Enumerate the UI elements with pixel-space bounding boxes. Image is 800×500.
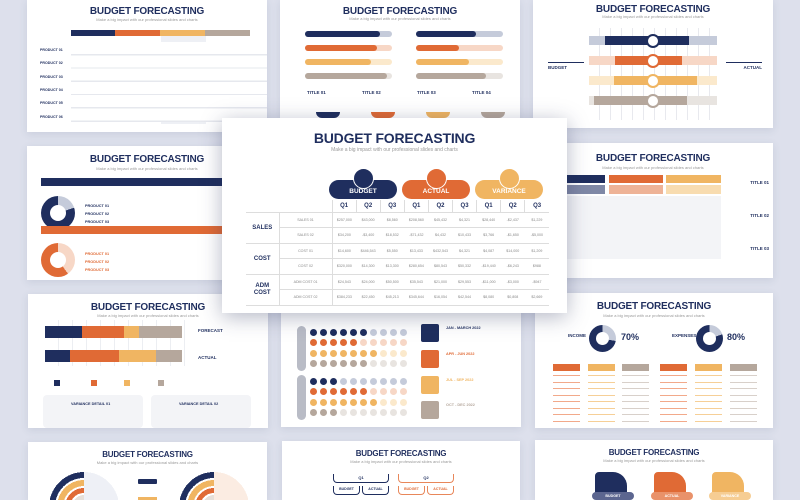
tab: variance: VARIANCE [721,494,739,498]
quarter icons and labels: APR - JUN 2022 [446,352,474,356]
data table: $14,000 [506,249,519,253]
header pill: variance: VARIANCE [492,188,526,195]
title: BUDGET FORECASTING [90,6,204,17]
Q2 bracket: BUDGET [404,487,419,491]
data table: Q3 [461,203,469,209]
product labels: PRODUCT 05 [40,101,63,105]
data table: $3,766 [483,233,494,237]
income pct: 70% [621,332,639,342]
data table: $18,532 [386,233,399,237]
data table: $22,450 [362,295,375,299]
actual label: ACTUAL [744,65,762,70]
data table: ADM COST 02 [294,295,317,299]
data table: $21,000 [434,280,447,284]
product labels: PRODUCT 03 [40,75,63,79]
data table: $8,080 [483,295,494,299]
quarter icons and labels [421,324,481,419]
slide: brackets bottom-middle: BUDGET FORECASTING [356,449,446,458]
data table: -$5,000 [531,233,543,237]
icons [316,112,505,118]
actual pill [297,375,306,420]
Q2 bracket: ACTUAL [433,487,448,491]
legend [54,380,164,386]
column headers and boxes [553,364,757,422]
titles [307,90,491,95]
labels forecast/actual [198,328,223,360]
center slide: main budget forecasting table [222,118,567,313]
data table: $5,550 [387,249,398,253]
variance boxes [43,395,251,428]
tab: variance [709,472,751,500]
data table: $50,332 [458,264,471,268]
slide: stacked bars left: BUDGET FORECASTING [91,302,205,313]
data table: ADM [255,282,269,288]
title: BUDGET FORECASTING [314,130,475,146]
month headers [567,175,721,259]
data table: Q3 [533,203,541,209]
data table [246,200,549,306]
data table: $16,054 [434,295,447,299]
data table: $2,669 [531,295,542,299]
data table: $14,300 [362,264,375,268]
data table: $80,543 [434,264,447,268]
variance boxes: VARIANCE DETAIL 02 [179,402,218,406]
data table: Q1 [485,203,493,209]
slide: income expenses donuts right: BUDGET FORECASTING [597,301,711,312]
income rows [85,204,109,224]
data table: COST 02 [298,264,313,268]
income header bar [41,178,261,186]
slide: horizontal bars top-middle: Make a big impact with our professional slides and charts [349,16,451,21]
slide: radial bottom-left: Make a big impact with our professional slides and charts [97,460,198,465]
budget label: BUDGET [548,65,567,70]
data table: ADM COST 01 [294,280,317,284]
slide: radial bottom-left: BUDGET FORECASTING [102,450,193,459]
quarter icons and labels: JAN - MARCH 2022 [446,326,481,330]
expense rows: PRODUCT 01 [85,252,109,256]
slide: income expenses donuts right: INCOME [568,333,586,338]
data table: COST [254,256,271,262]
data table: Q1 [412,203,420,209]
radial chart right [180,472,248,500]
month headers [71,30,250,36]
data table: $4,087 [483,249,494,253]
data table: -$3,000 [507,280,519,284]
data table: $28,440 [482,218,495,222]
slide: diverging chart top-right [533,0,773,128]
column shading [161,36,206,124]
budget bars [305,31,392,79]
product labels [40,48,63,119]
data table: $42,544 [458,295,471,299]
income rows: PRODUCT 01 [85,204,109,208]
data table: $34,200 [338,233,351,237]
data table: $43,000 [362,218,375,222]
right titles [750,180,769,251]
titles: TITLE 03 [417,90,436,95]
slide: tabs bottom-right: Make a big impact with our professional slides and charts [603,458,705,463]
data table: Q1 [340,203,348,209]
slide: income/expenses left [27,146,267,280]
product labels: PRODUCT 06 [40,115,63,119]
data table: Q2 [436,203,444,209]
data table: $4,432 [435,233,446,237]
variance boxes: VARIANCE DETAIL 01 [71,402,110,406]
data table: -$1,650 [507,233,519,237]
data table: -$947 [532,280,541,284]
data table: $1,209 [531,249,542,253]
data table: Q2 [509,203,517,209]
slide: income expenses donuts right: Make a big impact with our professional slides and charts [603,313,705,318]
data table: $50,500 [386,280,399,284]
data table: $4,321 [459,249,470,253]
Q2 bracket: Q2 [423,475,429,480]
Q2 bracket [398,474,454,495]
expense rows [85,252,109,272]
data table: $0,808 [507,295,518,299]
slide: monthly table right: Make a big impact with our professional slides and charts [602,165,704,170]
titles: TITLE 02 [362,90,381,95]
data table: -$3,400 [362,233,374,237]
stacked bar chart [45,320,185,366]
right titles: TITLE 03 [750,246,769,251]
slide: income/expenses left: BUDGET FORECASTING [90,154,204,165]
data table: SALES 02 [297,233,314,237]
subtitle: Make a big impact with our professional slides and charts [331,147,458,153]
tab: budget [592,472,634,500]
slide: stacked bars left: Make a big impact with our professional slides and charts [97,313,199,318]
slide: product table top-left [27,0,267,132]
titles: TITLE 04 [472,90,491,95]
tab: actual [651,472,693,500]
slide: brackets bottom-middle [282,441,520,500]
slide: tabs bottom-right [535,440,773,500]
data table: $280,654 [409,264,424,268]
data table: $14,600 [338,249,351,253]
chart [589,28,717,120]
Q1 bracket: BUDGET [339,487,354,491]
product labels: PRODUCT 01 [40,48,63,52]
slide: diverging chart top-right: BUDGET FORECASTING [596,4,710,15]
legend tag [138,479,157,484]
tab: budget: BUDGET [605,494,621,498]
slide: dot matrix middle [281,300,521,427]
data table: $320,000 [337,264,352,268]
data table: SALES 01 [297,218,314,222]
data table: $10,433 [458,233,471,237]
header pill: variance [475,169,543,199]
data table: -$19,440 [482,264,496,268]
data table: COST 01 [298,249,313,253]
data table: -$11,000 [482,280,496,284]
slide: income expenses donuts right: 80% [727,332,745,342]
data table: $13,433 [410,249,423,253]
quarter icons and labels: JUL - SEP 2022 [446,378,474,382]
data table: $4,321 [459,218,470,222]
slide: income expenses donuts right: EXPENSES [672,333,696,338]
header pill: actual [402,169,470,199]
expense rows: PRODUCT 02 [85,260,109,264]
product labels: PRODUCT 04 [40,88,63,92]
expenses header bar [41,226,261,234]
Q1 bracket: Q1 [358,475,364,480]
slide: income/expenses left: Make a big impact with our professional slides and charts [96,166,198,171]
expenses donut [41,243,75,277]
quarter icons and labels: OCT - DEC 2022 [446,403,475,407]
header pill: budget: BUDGET [349,188,377,195]
data table: SALES [252,224,272,230]
data table: $432,543 [433,249,448,253]
header pill: actual: ACTUAL [423,188,449,195]
data table: -$2,437 [507,218,519,222]
right titles: TITLE 02 [750,213,769,218]
dots [310,329,407,416]
data table: -$71,432 [409,233,423,237]
header pill: budget [329,169,397,199]
labels forecast/actual: FORECAST [198,328,223,333]
slide: income expenses donuts right [535,293,773,428]
titles: TITLE 01 [307,90,326,95]
labels forecast/actual: ACTUAL [198,355,216,360]
slide: radial bottom-left [28,442,267,500]
budget pill [297,326,306,371]
income rows: PRODUCT 03 [85,220,109,224]
data table: $257,000 [337,218,352,222]
right titles: TITLE 01 [750,180,769,185]
data table: Q2 [364,203,372,209]
slide: tabs bottom-right: BUDGET FORECASTING [609,448,699,457]
data table: $24,543 [338,280,351,284]
income rows: PRODUCT 02 [85,212,109,216]
title: BUDGET FORECASTING [343,6,457,17]
data table: $446,543 [361,249,376,253]
income donut [589,325,616,352]
data table: $45,213 [386,295,399,299]
data table: $45,432 [434,218,447,222]
data table: $35,543 [410,280,423,284]
data table: COST [254,290,271,296]
product labels: PRODUCT 02 [40,61,63,65]
data table: $29,553 [458,280,471,284]
data table: $13,300 [386,264,399,268]
slide: monthly table right: BUDGET FORECASTING [596,153,710,164]
expense rows: PRODUCT 03 [85,268,109,272]
data table: Q3 [388,203,396,209]
subtitle: Make a big impact with our professional slides and charts [96,17,198,22]
data table: $345,644 [409,295,424,299]
expenses donut [696,325,723,352]
slide: stacked bars left [28,294,268,428]
income donut [41,196,75,230]
data table: $988 [533,264,541,268]
data table: $1,229 [531,218,542,222]
tab: actual: ACTUAL [665,494,679,498]
data table: $8,560 [387,218,398,222]
slide: brackets bottom-middle: Make a big impact with our professional slides and charts [350,459,452,464]
data table: $208,560 [409,218,424,222]
data table: $24,000 [362,280,375,284]
Q1 bracket: ACTUAL [368,487,383,491]
radial chart left [50,472,118,500]
data table: $384,233 [337,295,352,299]
Q1 bracket [333,474,389,495]
data table: -$6,243 [507,264,519,268]
slide: monthly table right [533,143,773,278]
slide: horizontal bars top-middle [280,0,520,118]
actual bars [416,31,503,79]
slide: diverging chart top-right: Make a big impact with our professional slides and charts [602,14,704,19]
